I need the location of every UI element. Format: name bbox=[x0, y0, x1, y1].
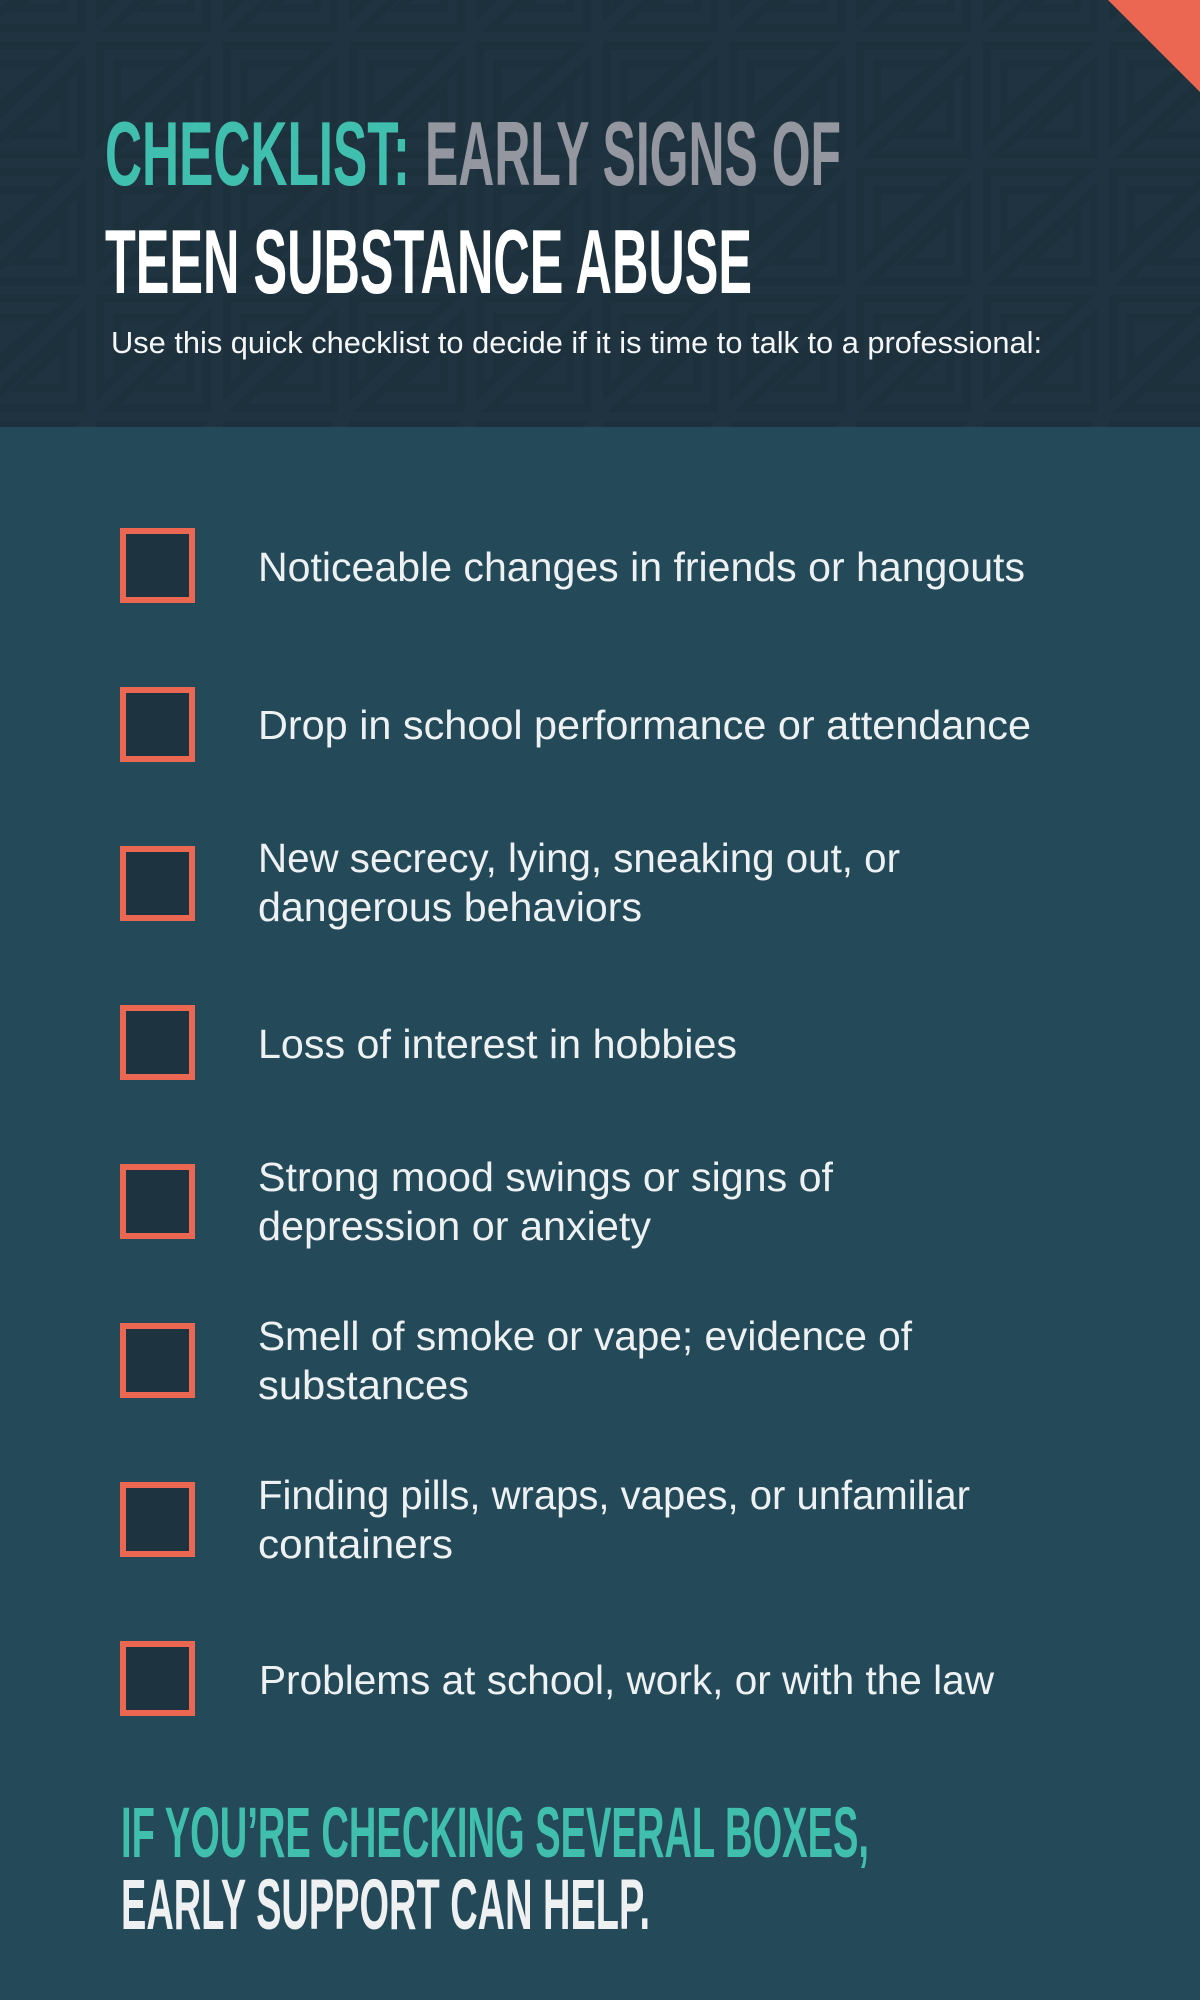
checklist item 2 bbox=[123, 690, 1031, 759]
checklist item 7: containers bbox=[258, 1521, 453, 1567]
checklist item 8 bbox=[123, 1644, 994, 1713]
icon: corner triangle bbox=[1108, 0, 1200, 92]
panel: checklist bbox=[123, 531, 1031, 1713]
panel: header bbox=[0, 0, 1200, 427]
checklist item 4 bbox=[123, 1008, 737, 1077]
checklist item 3 bbox=[123, 835, 900, 930]
checklist item 6 bbox=[123, 1313, 913, 1408]
checklist item 6: Smell of smoke or vape; evidence of bbox=[258, 1313, 913, 1359]
title: EARLY SIGNS OF bbox=[425, 104, 841, 205]
checklist item 7 bbox=[123, 1472, 970, 1567]
closing callout: EARLY SUPPORT CAN HELP. bbox=[121, 1866, 650, 1945]
subtitle text: Use this quick checklist to decide if it is time to talk to a professional: bbox=[111, 325, 1042, 360]
checklist item 4: Loss of interest in hobbies bbox=[258, 1021, 737, 1067]
title: CHECKLIST: bbox=[105, 104, 410, 205]
checklist item 5: Strong mood swings or signs of bbox=[258, 1154, 834, 1200]
checklist item 5 bbox=[123, 1154, 834, 1249]
checklist item 6: substances bbox=[258, 1362, 469, 1408]
checklist item 1: Noticeable changes in friends or hangouts bbox=[258, 544, 1025, 590]
checklist item 3: dangerous behaviors bbox=[258, 884, 642, 930]
closing callout bbox=[121, 1794, 869, 1945]
checklist item 5: depression or anxiety bbox=[258, 1203, 651, 1249]
checklist item 8: Problems at school, work, or with the law bbox=[259, 1657, 994, 1703]
title bbox=[105, 104, 841, 313]
checklist item 7: Finding pills, wraps, vapes, or unfamiliar bbox=[258, 1472, 970, 1518]
checklist item 2: Drop in school performance or attendance bbox=[258, 702, 1031, 748]
checklist item 3: New secrecy, lying, sneaking out, or bbox=[258, 835, 900, 881]
checklist item 1 bbox=[123, 531, 1025, 600]
